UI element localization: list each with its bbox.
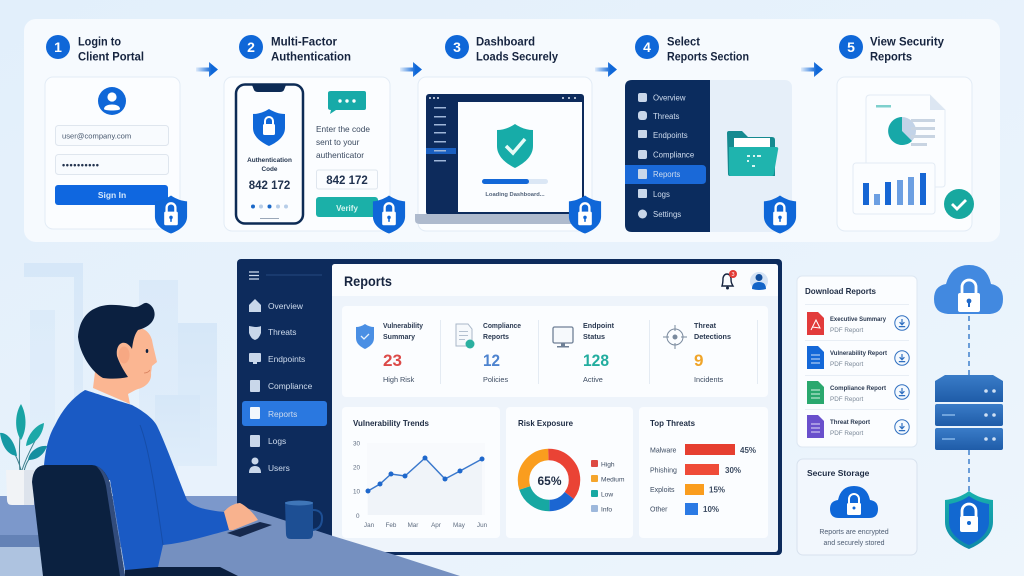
reports heading: Reports <box>344 273 392 289</box>
step 1: login to client portal: •••••••••• <box>62 160 100 170</box>
card: vulnerability summary: Summary <box>383 332 415 341</box>
chart: top threats bars: Exploits <box>650 487 675 494</box>
step 4: select reports section: Overview <box>653 94 686 102</box>
background: city window scene <box>24 263 217 470</box>
icon: coffee mug <box>285 500 322 539</box>
card: threat detections <box>663 321 731 384</box>
step 3: dashboard loads securely: Loads Securely <box>476 50 558 64</box>
card: vulnerability summary: High Risk <box>383 375 415 384</box>
chart: vulnerability trends <box>342 407 500 538</box>
step 2: multi-factor authentication: sent to your <box>316 137 360 147</box>
step 1: login to client portal <box>45 34 187 234</box>
report row: compliance report <box>807 381 909 404</box>
front desk surface <box>150 505 460 576</box>
step 5: view security reports <box>837 34 974 231</box>
step 1: login to client portal: Client Portal <box>78 50 144 64</box>
card: threat detections: 9 <box>694 351 703 370</box>
report row: executive summary: PDF Report <box>830 327 863 334</box>
chart: vulnerability trends: 0 <box>356 513 360 520</box>
card: compliance reports: Reports <box>483 332 509 341</box>
step 2: multi-factor authentication: 2 <box>247 39 255 55</box>
chart: vulnerability trends: Feb <box>386 522 397 529</box>
monitor sidebar <box>242 272 327 473</box>
step 5: view security reports: 5 <box>847 39 855 55</box>
back desk <box>0 496 240 576</box>
chart: vulnerability trends: Jun <box>477 522 488 529</box>
step 2: multi-factor authentication: Verify <box>336 204 358 213</box>
step 4: select reports section: Reports <box>653 170 680 179</box>
chart: vulnerability trends: Apr <box>431 522 441 529</box>
step 4: select reports section: Reports Section <box>667 50 749 64</box>
arrow: step 4 to 5 <box>801 62 823 77</box>
card: vulnerability summary <box>356 321 423 384</box>
card: vulnerability summary: Vulnerability <box>383 321 423 330</box>
dashed connector lines <box>968 316 970 492</box>
chart: risk exposure donut: 65% <box>537 474 562 488</box>
monitor: reports dashboard <box>237 259 782 555</box>
panel: secure storage: Secure Storage <box>807 468 870 478</box>
step 1: login to client portal: Login to <box>78 34 121 48</box>
step 2: multi-factor authentication: Enter the code <box>316 124 370 134</box>
monitor sidebar: Reports <box>268 409 297 419</box>
step 3: dashboard loads securely: Loading Dashboard... <box>485 192 545 198</box>
monitor sidebar: Logs <box>268 436 286 446</box>
card: compliance reports <box>456 321 521 384</box>
chart: top threats bars: Top Threats <box>650 418 695 428</box>
chart: top threats bars: 30% <box>725 466 741 475</box>
step 2: multi-factor authentication: Authentication <box>247 157 292 164</box>
card: compliance reports: Policies <box>483 375 508 384</box>
chart: top threats bars: 15% <box>709 486 725 494</box>
chart: vulnerability trends: Vulnerability Trends <box>353 418 429 428</box>
card: vulnerability summary: 23 <box>383 351 402 370</box>
report row: threat report: PDF Report <box>830 430 863 437</box>
step 4: select reports section: Threats <box>653 112 680 121</box>
report row: executive summary <box>807 312 909 335</box>
step 2: multi-factor authentication: authenticator <box>316 150 364 160</box>
card: threat detections: Detections <box>694 332 731 341</box>
chart: top threats bars: 10% <box>703 505 719 514</box>
chart: risk exposure donut: Medium <box>601 476 625 484</box>
illustration: person at desk <box>32 303 272 576</box>
arrow: step 3 to 4 <box>595 62 617 77</box>
step 4: select reports section: Endpoints <box>653 131 688 140</box>
step 2: multi-factor authentication: 842 172 <box>326 175 368 187</box>
card: compliance reports: Compliance <box>483 321 521 330</box>
card: endpoint status: 128 <box>583 351 609 370</box>
panel: secure storage: and securely stored <box>823 540 885 547</box>
chart: top threats bars: Malware <box>650 448 677 454</box>
icon: notification bell <box>722 270 737 290</box>
card: endpoint status: Active <box>583 375 603 384</box>
report row: vulnerability report: PDF Report <box>830 361 863 368</box>
chart: vulnerability trends: Jan <box>364 522 375 529</box>
monitor sidebar: Compliance <box>268 381 313 391</box>
panel: secure storage: Reports are encrypted <box>819 529 889 536</box>
step 5: view security reports: Reports <box>870 50 912 64</box>
report row: compliance report: Compliance Report <box>830 385 887 392</box>
step 1: login to client portal: 1 <box>54 39 62 55</box>
summary cards row <box>342 306 768 397</box>
icon: cloud with lock <box>934 265 1003 314</box>
monitor sidebar: Threats <box>268 327 296 337</box>
report row: threat report <box>807 415 909 438</box>
chart: risk exposure donut <box>506 407 633 538</box>
report row: executive summary: Executive Summary <box>830 316 886 323</box>
monitor content area <box>332 264 778 552</box>
chart: top threats bars: 45% <box>740 446 756 455</box>
chart: vulnerability trends: 20 <box>353 464 361 472</box>
step 4: select reports section: 4 <box>643 39 651 55</box>
report row: threat report: Threat Report <box>830 419 871 426</box>
card: threat detections: Incidents <box>694 375 724 384</box>
chart: vulnerability trends: 10 <box>353 488 361 496</box>
report row: compliance report: PDF Report <box>830 396 863 403</box>
plant <box>0 404 47 505</box>
step 1: login to client portal: user@company.com <box>62 132 131 140</box>
report row: vulnerability report: Vulnerability Report <box>830 350 888 357</box>
card: compliance reports: 12 <box>483 351 500 370</box>
chart: risk exposure donut: Low <box>601 492 613 498</box>
step 3: dashboard loads securely: 3 <box>453 39 461 55</box>
chart: risk exposure donut: Risk Exposure <box>518 418 573 428</box>
step 4: select reports section: Logs <box>653 190 670 199</box>
step 2: multi-factor authentication: 842 172 <box>249 180 290 192</box>
step 2: multi-factor authentication: Multi-Factor <box>271 34 337 48</box>
card: endpoint status: Endpoint <box>583 321 615 330</box>
panel: download reports: Download Reports <box>805 286 876 296</box>
chart: top threats bars: Other <box>650 506 668 514</box>
chart: vulnerability trends: Mar <box>408 522 418 529</box>
icon: large security shield <box>945 491 993 549</box>
chart: risk exposure donut: High <box>601 462 615 468</box>
step 2: multi-factor authentication: Code <box>262 166 278 173</box>
card: endpoint status: Status <box>583 332 605 341</box>
chart: vulnerability trends: 30 <box>353 440 361 448</box>
card: threat detections: Threat <box>694 321 717 330</box>
report row: vulnerability report <box>807 346 909 369</box>
step 4: select reports section: Settings <box>653 210 681 219</box>
arrow: step 2 to 3 <box>400 62 422 77</box>
monitor sidebar: Users <box>268 463 290 473</box>
step 2: multi-factor authentication <box>224 34 405 234</box>
panel: secure storage <box>797 459 917 555</box>
panel: five step workflow <box>24 19 1000 242</box>
step 5: view security reports: View Security <box>870 34 944 48</box>
step 4: select reports section: Compliance <box>653 150 694 160</box>
icon: user avatar <box>750 272 768 290</box>
card: endpoint status <box>553 321 615 384</box>
step 1: login to client portal: Sign In <box>98 190 126 200</box>
chart: vulnerability trends: May <box>453 522 466 529</box>
step 3: dashboard loads securely <box>415 34 601 234</box>
panel: download reports <box>797 276 917 447</box>
step 4: select reports section <box>625 34 796 234</box>
icon: server stack <box>935 375 1003 450</box>
chart: top threats bars <box>639 407 768 538</box>
arrow: step 1 to 2 <box>196 62 218 77</box>
step 4: select reports section: Select <box>667 34 700 48</box>
step 3: dashboard loads securely: Dashboard <box>476 34 535 48</box>
chart: top threats bars: Phishing <box>650 468 677 474</box>
chart: risk exposure donut: Info <box>601 506 612 514</box>
icon: notification bell: 3 <box>731 272 735 278</box>
monitor sidebar: Endpoints <box>268 354 305 364</box>
step 2: multi-factor authentication: Authentication <box>271 50 351 64</box>
monitor sidebar: Overview <box>268 301 304 311</box>
